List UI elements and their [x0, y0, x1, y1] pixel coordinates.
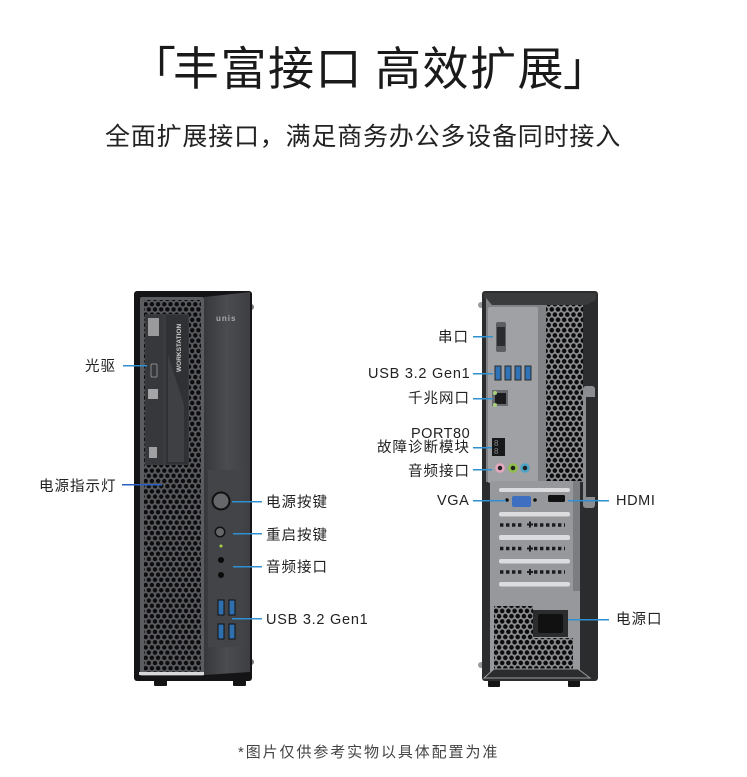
brand logo: unis: [216, 314, 236, 323]
callout: VGA: VGA: [437, 493, 469, 509]
callout: rear USB: USB 3.2 Gen1: [368, 366, 470, 382]
front I/O panel: [208, 470, 243, 647]
rear USB ports: [495, 366, 531, 380]
title: 」: [563, 43, 609, 95]
callout: power socket: [568, 611, 662, 628]
rear mesh: [546, 305, 583, 481]
IO plate: [488, 307, 538, 483]
callout: power indicator: [39, 478, 162, 495]
VGA port: [505, 496, 537, 507]
rear chassis: [482, 291, 598, 681]
front mesh panel: [140, 297, 204, 676]
port80 display: 8: [494, 439, 499, 448]
callout: VGA: [437, 493, 506, 509]
callout: optical drive: 光驱: [85, 358, 116, 375]
lower plate: [490, 481, 590, 678]
callout: front audio: [233, 559, 328, 576]
subtitle: 全面扩展接口，满足商务办公多设备同时接入: [105, 123, 621, 151]
callout: reset button: [233, 527, 328, 544]
rear feet: [488, 679, 580, 687]
title: 丰富接口: [173, 43, 363, 95]
callout: reset button: 重启按键: [266, 527, 328, 544]
front feet: [154, 679, 246, 686]
LED: [220, 544, 222, 548]
power socket: [533, 610, 568, 637]
footnote: *图片仅供参考实物以具体配置为准: [238, 744, 499, 761]
callout: power button: [232, 494, 328, 511]
expansion slots: [499, 488, 570, 586]
rear top plate: [484, 293, 596, 305]
port80 display: [492, 438, 505, 456]
rear base: [484, 669, 590, 678]
callout: PORT80: 故障诊断模块: [377, 438, 470, 456]
rear view of computer: [478, 291, 598, 687]
rear screws: [478, 302, 484, 668]
power button: [212, 492, 230, 510]
callout: PORT80: PORT80: [411, 426, 470, 442]
title: 「: [130, 43, 176, 95]
callout: front audio: 音频接口: [266, 559, 328, 576]
front right panel: [204, 292, 250, 675]
reset button: [214, 526, 226, 538]
port80 display: 8: [494, 447, 499, 456]
callout: gigabit ethernet: 千兆网口: [408, 390, 470, 407]
audio ports: [496, 464, 528, 472]
handle: [583, 386, 595, 508]
callout: front USB: USB 3.2 Gen1: [266, 612, 368, 628]
callout: rear audio: [408, 463, 492, 480]
callout: serial: [438, 329, 493, 346]
lower mesh: [494, 606, 573, 669]
title: 高效扩展: [375, 43, 565, 95]
callout: power button: 电源按键: [266, 494, 328, 511]
callout: power socket: 电源口: [616, 611, 662, 628]
USB ports: [218, 600, 235, 639]
slot vent holes: [500, 525, 565, 572]
callout: rear audio: 音频接口: [408, 463, 470, 480]
audio jacks: [218, 557, 224, 563]
front screws: [248, 304, 254, 665]
callout: serial: 串口: [438, 329, 469, 346]
callout: gigabit ethernet: [408, 390, 493, 407]
ethernet port: [492, 390, 508, 407]
callout: optical drive: [85, 358, 147, 375]
callout: HDMI: [568, 493, 655, 509]
front chassis: [134, 291, 252, 681]
HDMI port: [548, 495, 565, 502]
callout: HDMI: HDMI: [616, 493, 655, 509]
callout: power indicator: 电源指示灯: [39, 478, 116, 495]
drive label: WORKSTATION: [176, 324, 183, 372]
optical drive bay: [145, 314, 189, 465]
callout: PORT80: [377, 426, 492, 456]
serial port: [496, 322, 506, 352]
front view of computer: [134, 291, 254, 686]
